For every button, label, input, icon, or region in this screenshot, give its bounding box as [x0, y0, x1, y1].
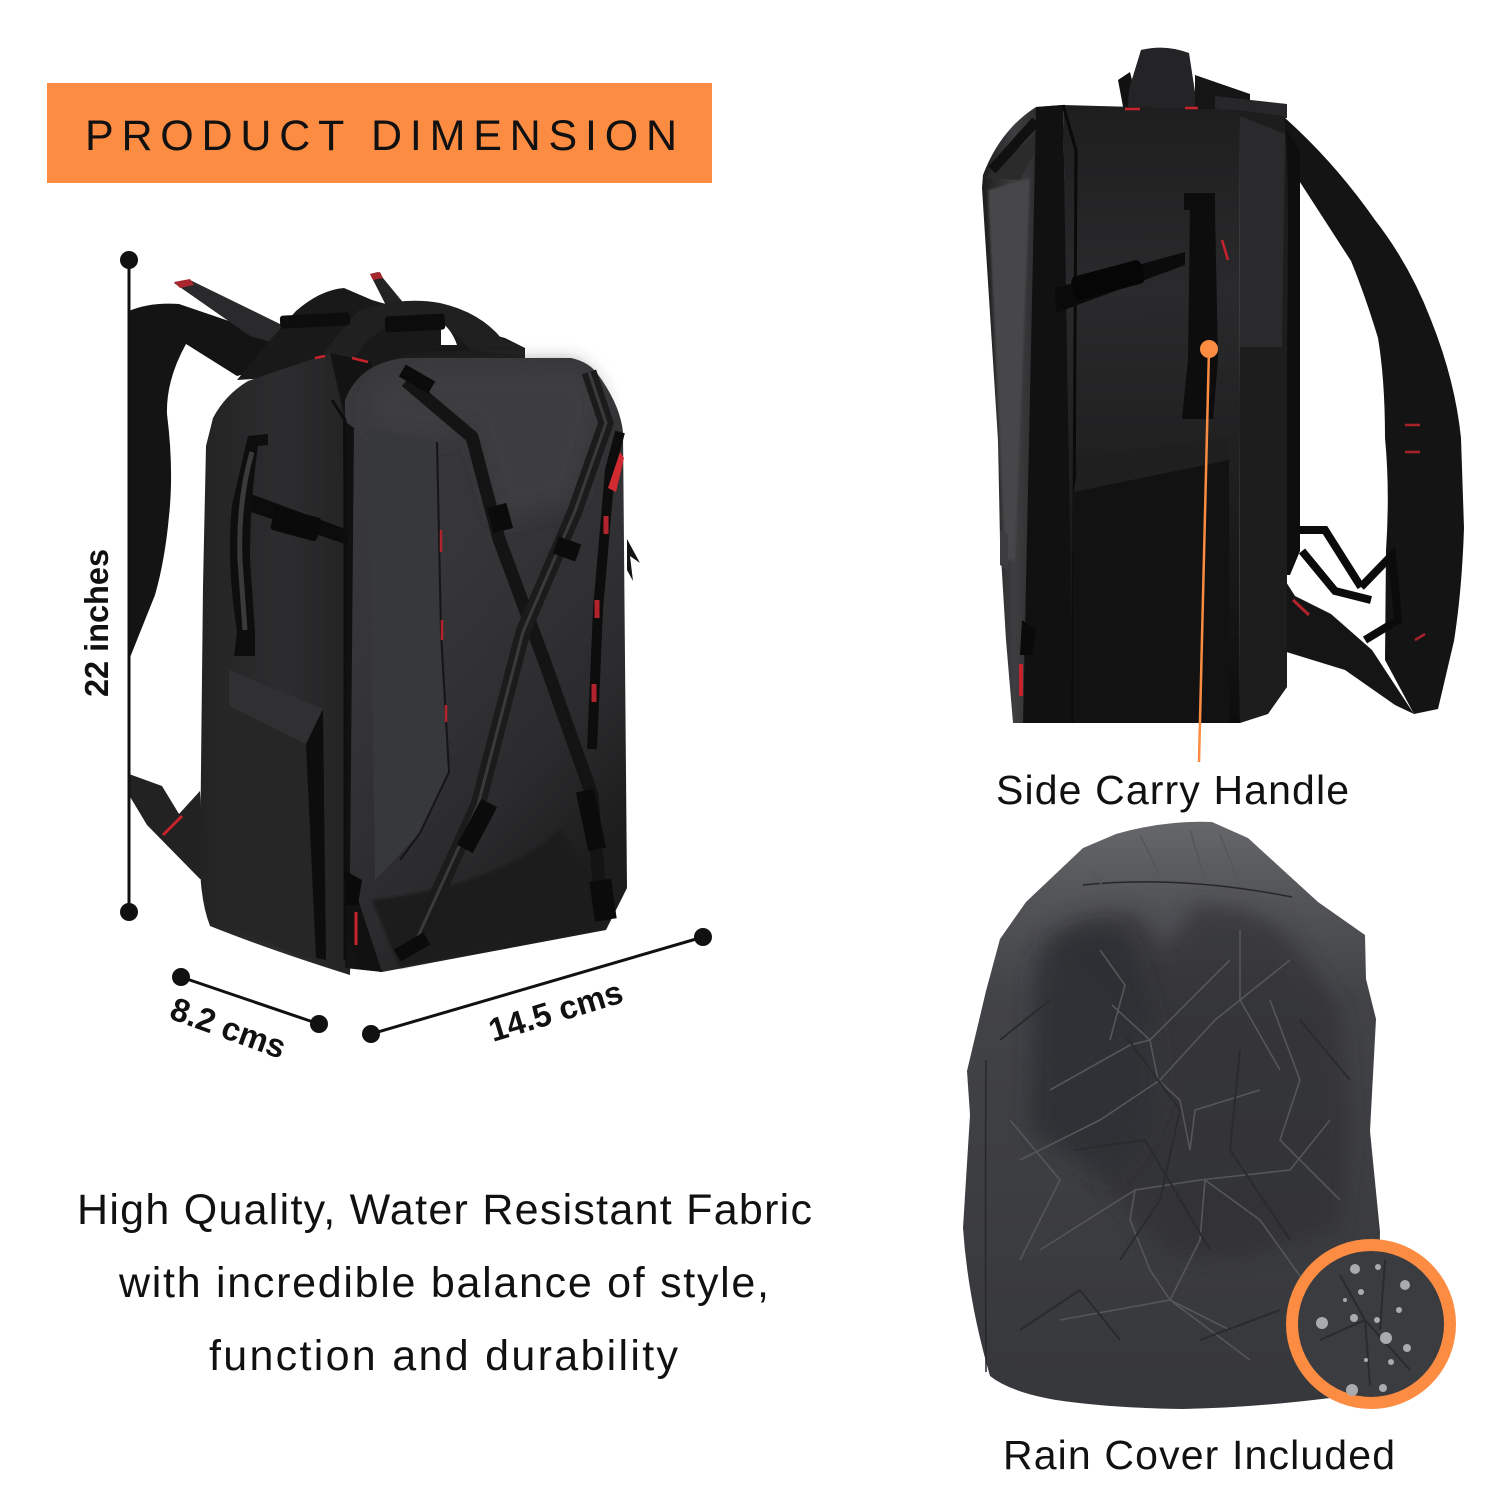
width label: 14.5 cms — [484, 973, 627, 1049]
gap under handle — [441, 322, 457, 345]
zipper bands — [1023, 105, 1075, 723]
rear tab — [370, 272, 406, 325]
wrinkles — [1010, 830, 1340, 1360]
mesh side pocket — [225, 670, 330, 965]
glossy top of front panel — [372, 366, 600, 520]
rain cover label: Rain Cover Included — [1003, 1432, 1395, 1478]
title banner: PRODUCT DIMENSION — [85, 112, 677, 160]
strap buckles — [394, 364, 617, 962]
top buckle — [1215, 96, 1287, 118]
rear panel — [1239, 110, 1288, 723]
lower webbing — [1272, 560, 1414, 714]
side-view backpack photo — [982, 48, 1464, 723]
width dimension line — [362, 928, 712, 1043]
depth label: 8.2 cms — [166, 990, 291, 1066]
water droplet inset — [1292, 1245, 1450, 1403]
side handle callout — [1199, 340, 1218, 762]
crossing straps — [406, 372, 606, 954]
fabric description — [77, 1186, 812, 1380]
side panel — [200, 353, 365, 975]
side main body — [1063, 105, 1240, 723]
side buckle strap — [1055, 252, 1185, 313]
side carry handle — [1182, 193, 1218, 419]
fabric description: High Quality, Water Resistant Fabric — [77, 1186, 812, 1234]
height dimension line — [120, 251, 138, 921]
fabric description: function and durability — [209, 1332, 678, 1380]
zipper pull — [344, 870, 362, 905]
side pocket — [1073, 438, 1229, 723]
zipper band — [330, 353, 382, 972]
front-angle backpack photo — [129, 272, 640, 975]
height label: 22 inches — [78, 549, 115, 697]
dark shape of bag under cover — [1040, 905, 1350, 1260]
lower dark sweep — [372, 830, 605, 968]
side buckle strap — [251, 494, 348, 545]
side carry handle — [230, 434, 268, 656]
depth dimension line — [172, 968, 328, 1033]
red top stitches — [315, 356, 368, 362]
top-left compression buckle — [992, 121, 1036, 170]
zipper pull — [1020, 620, 1036, 655]
shoulder strap — [1280, 116, 1464, 714]
lower strap — [129, 774, 205, 880]
red accents — [1019, 664, 1023, 696]
back mesh panel — [1278, 118, 1300, 575]
far shoulder strap — [129, 304, 300, 660]
fabric panel — [368, 428, 449, 880]
front panel — [344, 358, 627, 972]
top handle — [323, 301, 525, 365]
front shell — [982, 105, 1062, 723]
rain cover photo — [963, 822, 1380, 1409]
top bridge between straps and body — [237, 288, 525, 380]
title banner — [47, 83, 712, 183]
top handle — [1118, 72, 1140, 112]
seam lines — [986, 882, 1292, 1372]
side handle label: Side Carry Handle — [996, 767, 1349, 813]
fabric description: with incredible balance of style, — [118, 1259, 769, 1307]
right trim band with red accents — [592, 432, 620, 749]
